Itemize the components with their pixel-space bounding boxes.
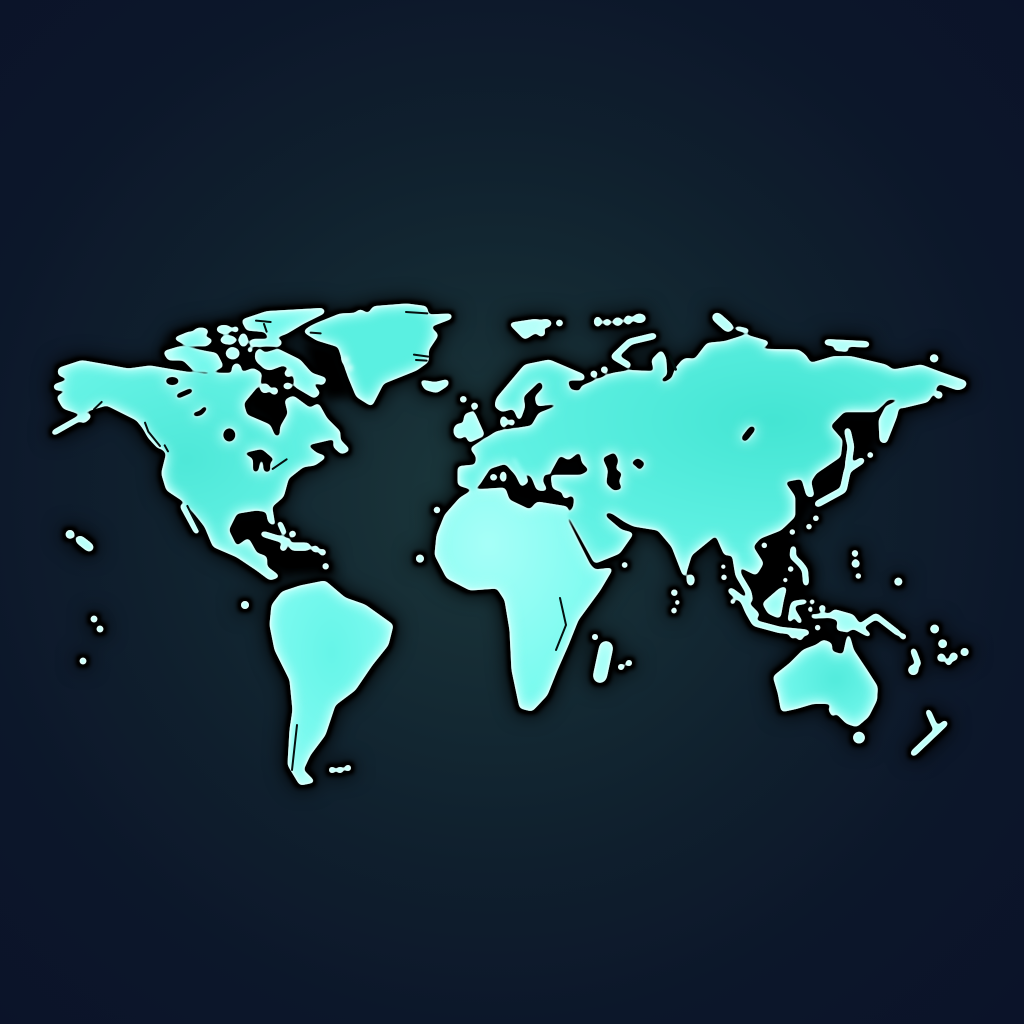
- continent: Africa: [435, 488, 613, 711]
- continent: Australia: [773, 632, 877, 727]
- Aleutian and Pacific coast strips: [54, 385, 318, 547]
- continent: South America: [270, 581, 393, 785]
- dark seas behind the land: [162, 317, 879, 650]
- island: Iceland: [420, 379, 448, 393]
- South-East Asia and Oceania: [671, 524, 969, 753]
- island: New Guinea: [810, 609, 872, 637]
- world map illustration: [44, 291, 976, 794]
- North America, Greenland and Arctic islands: [53, 304, 452, 580]
- small islands: Canada, Hawaii, Caribbean: [66, 356, 440, 570]
- thin coastline and river details over the land: [94, 312, 676, 770]
- island: Great Britain and Ireland: [454, 412, 484, 443]
- island: Greenland: [303, 304, 452, 406]
- glowing land masses: [53, 304, 969, 785]
- Indonesian and Pacific island arcs: [731, 548, 945, 753]
- small islands: Europe, Arctic, Pacific: [460, 314, 943, 568]
- Eurasia and nearby islands: [454, 314, 967, 578]
- continent: North America: [53, 361, 350, 580]
- island: Kamchatka strip: [879, 400, 900, 443]
- Arctic and Japanese island arcs: [514, 317, 867, 504]
- Arctic archipelago: [163, 308, 327, 398]
- island: Svalbard: [509, 319, 551, 339]
- island: Madagascar: [600, 648, 606, 676]
- land with lakes cut out: [53, 304, 969, 785]
- small islands: Indian and Pacific Ocean: [671, 524, 969, 743]
- continent: Eurasia: [458, 335, 967, 578]
- small islands: South Atlantic and Indian Ocean: [80, 601, 632, 773]
- island: Borneo: [763, 587, 787, 618]
